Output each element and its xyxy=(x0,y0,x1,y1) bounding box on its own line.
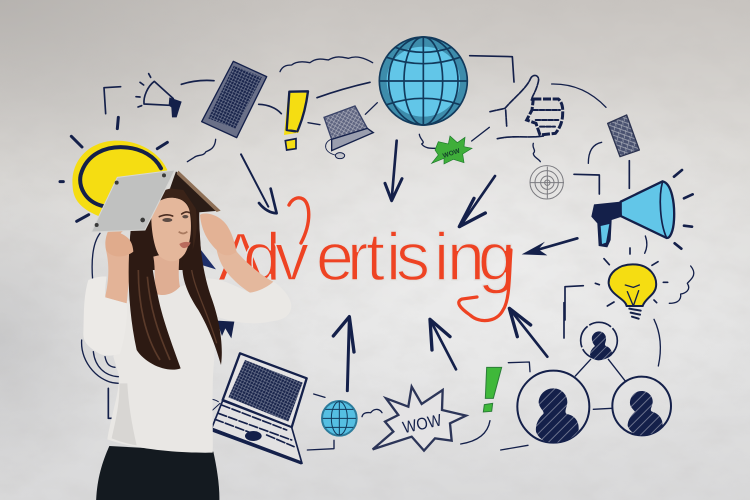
icon: green wow burst: WOW xyxy=(442,148,462,160)
icon: yellow exclamation mark xyxy=(284,91,308,150)
icon: small megaphone xyxy=(136,74,182,117)
torso xyxy=(107,278,215,453)
headline: Advertising: Advertising xyxy=(218,219,516,295)
right arm sleeve xyxy=(207,278,291,323)
icon: small phone xyxy=(608,115,639,157)
icon: person top xyxy=(581,322,617,360)
icon: wow burst: WOW xyxy=(401,410,444,437)
jeans xyxy=(96,446,219,500)
arrow: down to headline xyxy=(385,141,402,201)
connector xyxy=(552,84,606,107)
headline: Advertising xyxy=(218,198,516,321)
headline flourish: g descender hook xyxy=(459,250,511,321)
bracket xyxy=(508,362,530,372)
woman with laptop on head xyxy=(83,170,291,500)
arrow: from thumbs up to headline xyxy=(459,176,495,227)
doodles: lower row xyxy=(307,308,671,451)
connector xyxy=(308,123,320,125)
icon: person right xyxy=(612,377,671,435)
icon: yellow light bulb xyxy=(60,136,167,221)
arc xyxy=(92,233,100,280)
icon: large megaphone xyxy=(591,170,693,249)
left sleeve xyxy=(83,276,127,356)
arrow: up from people xyxy=(509,308,547,357)
facial features xyxy=(159,212,191,248)
doodles: upper left xyxy=(60,57,377,221)
divider line xyxy=(561,303,566,338)
arrow fragment xyxy=(197,247,216,269)
icon: small laptop xyxy=(324,106,373,159)
arrow: from megaphone to headline xyxy=(522,238,577,255)
connector xyxy=(314,394,325,397)
cloud line xyxy=(280,57,373,72)
connector xyxy=(501,445,528,450)
icon: tablet xyxy=(202,61,267,138)
neck xyxy=(153,250,180,295)
long hair left xyxy=(129,207,181,370)
doodle fragments behind the woman xyxy=(82,233,307,465)
doodles: upper right xyxy=(379,37,694,338)
icon: green wow burst xyxy=(432,136,472,164)
laptop on head xyxy=(91,170,221,232)
connector xyxy=(365,103,377,114)
bracket xyxy=(307,440,334,450)
bracket xyxy=(104,87,121,114)
icon: small globe xyxy=(322,401,357,436)
bracket xyxy=(470,56,514,82)
icon: green exclamation mark xyxy=(483,367,502,412)
connector squiggle xyxy=(187,139,216,162)
arrow: up from wow burst xyxy=(430,319,456,369)
bracket xyxy=(574,174,599,194)
arrow fragment xyxy=(217,321,234,338)
connector squiggle xyxy=(419,134,435,148)
connector xyxy=(645,236,647,253)
connector squiggle xyxy=(669,266,694,303)
arrow: to headline from tablet xyxy=(241,154,277,213)
icon: thumbs up xyxy=(490,75,563,139)
left hand xyxy=(105,218,133,256)
icon: person large xyxy=(517,371,589,443)
icon: target xyxy=(530,166,564,199)
connector xyxy=(588,142,602,163)
long hair right xyxy=(182,190,222,365)
connector xyxy=(259,104,281,114)
network links xyxy=(575,359,625,409)
connector xyxy=(461,421,490,444)
connector xyxy=(181,80,214,84)
connector xyxy=(627,161,632,188)
icon: yellow bulb xyxy=(595,248,668,319)
right hand xyxy=(200,213,237,255)
connector xyxy=(654,319,660,366)
hair back xyxy=(130,187,202,270)
face xyxy=(151,198,191,261)
left forearm xyxy=(105,250,133,303)
concentric signal arcs xyxy=(82,340,118,383)
icon: large laptop xyxy=(206,353,307,465)
icon: blue globe xyxy=(379,37,467,125)
connector xyxy=(472,127,489,141)
hair fringe xyxy=(153,187,197,250)
bracket xyxy=(565,286,583,320)
dash xyxy=(113,117,123,129)
icon: wow burst xyxy=(373,387,466,451)
shirt shading xyxy=(112,383,137,445)
connector squiggle xyxy=(362,409,382,417)
headline flourish: tall loop of the v xyxy=(289,198,309,243)
arrow: up from small globe xyxy=(333,317,354,391)
connector squiggle xyxy=(533,143,540,162)
right forearm xyxy=(217,248,273,293)
connector xyxy=(317,82,370,98)
bracket xyxy=(108,388,118,418)
